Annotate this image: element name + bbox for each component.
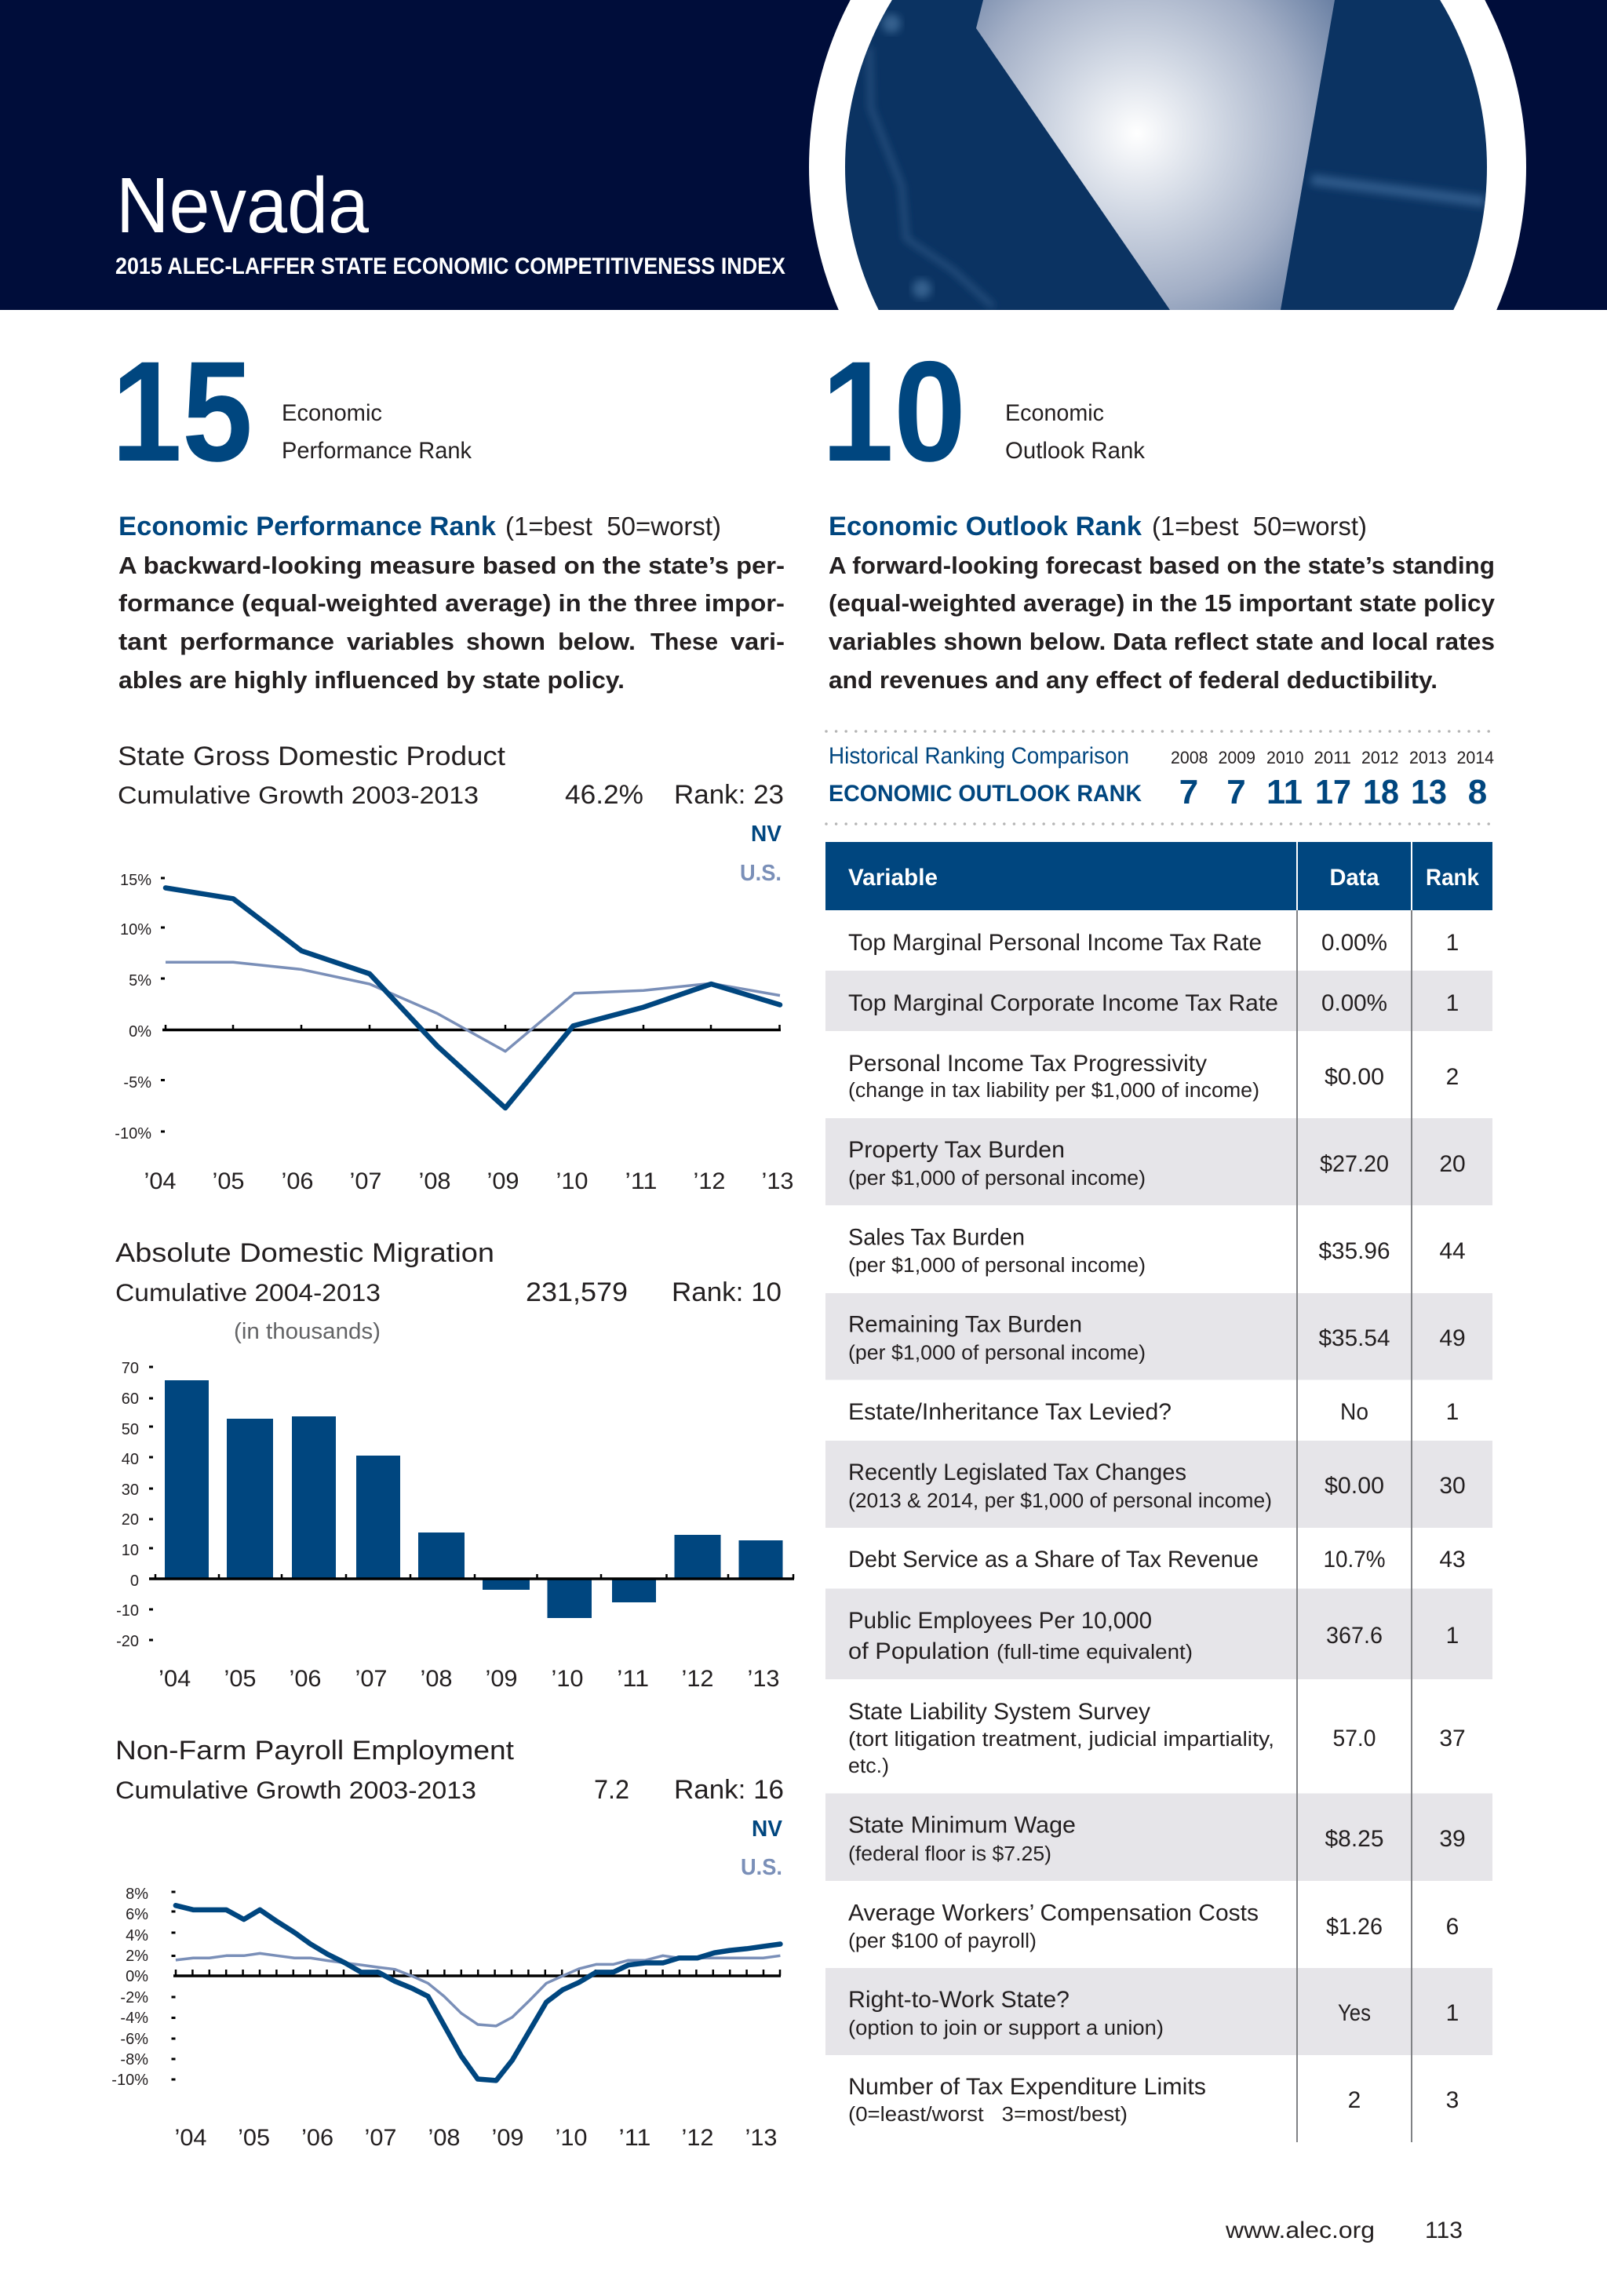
text block: outlook description: and revenues and any effect of federal deductibility. [829, 667, 1438, 694]
row: top marginal personal income tax rate [848, 930, 1459, 956]
heading: State Gross Domestic Product [118, 742, 505, 771]
heading: economic performance rank [118, 512, 721, 541]
row: right-to-work state [848, 1987, 1459, 2039]
line chart: GDP growth: ’04 [144, 1168, 176, 1194]
row: personal income tax progressivity: 2 [1446, 1064, 1459, 1090]
row: property tax burden: 20 [1439, 1151, 1466, 1177]
bar chart: migration: -10 [116, 1602, 139, 1620]
bar chart: migration: -20 [116, 1633, 139, 1650]
row: recently legislated tax changes: $0.00 [1325, 1473, 1384, 1499]
subheading with value and rank [115, 1775, 784, 1805]
rank label: Outlook Rank [1005, 438, 1145, 464]
line chart: GDP growth: ’05 [212, 1168, 245, 1194]
row: state minimum wage: (federal floor is $7.25) [848, 1843, 1051, 1865]
row: recently legislated tax changes: 30 [1439, 1473, 1466, 1499]
legend [740, 822, 782, 886]
row: estate inheritance tax [848, 1399, 1459, 1425]
text block: performance description: tant [118, 629, 167, 655]
text block: performance description: formance (equal-weighted average) in the three impor- [118, 590, 785, 617]
row: personal income tax progressivity: $0.00 [1325, 1064, 1384, 1090]
line chart: payroll employment growth: ’06 [301, 2125, 333, 2151]
subheading with value and rank: Cumulative 2004-2013 [115, 1278, 381, 1307]
line chart: payroll employment growth: ’12 [681, 2125, 714, 2151]
footer: 113 [1425, 2218, 1463, 2243]
row: workers compensation: $1.26 [1326, 1914, 1383, 1940]
bar chart: migration: 70 [122, 1360, 139, 1377]
label: historical ranking comparison: Historical Ranking Comparison [829, 743, 1129, 769]
row: workers compensation: Average Workers’ Compensation Costs [848, 1901, 1259, 1926]
rank label [1005, 400, 1145, 464]
table header: Data [1329, 865, 1379, 891]
bar chart: migration: ’13 [747, 1666, 780, 1692]
year labels: 2008 [1171, 748, 1208, 767]
line chart: GDP growth: 15% [120, 872, 151, 889]
subheading with value and rank: Cumulative Growth 2003-2013 [115, 1776, 476, 1804]
year labels [1171, 748, 1494, 767]
text block: outlook description: A forward-looking forecast based on the state’s standing [829, 552, 1495, 579]
historical rank values: 17 [1315, 773, 1351, 811]
panel: absolute domestic migration [115, 1238, 794, 1692]
row: remaining tax burden: (per $1,000 of personal income) [848, 1342, 1146, 1364]
panel: historical ranking comparison [826, 731, 1494, 824]
bar chart: migration: 0 [130, 1573, 139, 1590]
row: sales tax burden: (per $1,000 of personal income) [848, 1255, 1146, 1277]
table header: Rank [1426, 865, 1479, 891]
row: top marginal corporate income tax rate [848, 990, 1459, 1016]
text block: outlook description [829, 552, 1495, 694]
line chart: GDP growth: 5% [129, 972, 151, 989]
panel: header banner [0, 0, 1607, 310]
footer [1225, 2218, 1463, 2243]
row: state liability system survey: 57.0 [1332, 1726, 1376, 1751]
text block: performance description: performance [180, 629, 334, 655]
line chart: payroll employment growth: -4% [120, 2010, 148, 2027]
line chart: GDP growth: 0% [129, 1023, 151, 1040]
subheading with value and rank: 7.2 [594, 1775, 629, 1805]
line chart: payroll employment growth: ’05 [238, 2125, 270, 2151]
row: tax expenditure limits: 2 [1348, 2087, 1361, 2113]
row: right-to-work state: Right-to-Work State? [848, 1987, 1070, 2013]
year labels: 2014 [1456, 748, 1494, 767]
line chart: GDP growth: ’09 [486, 1168, 519, 1194]
row: public employees: 367.6 [1326, 1623, 1383, 1649]
row: personal income tax progressivity [848, 1051, 1459, 1102]
row: state minimum wage: 39 [1439, 1826, 1466, 1852]
bar chart: migration: 40 [122, 1451, 139, 1468]
text block: performance description: below. [558, 629, 636, 655]
rank label: Economic [1005, 400, 1104, 426]
bar chart: migration: ’06 [289, 1666, 322, 1692]
historical rank values [1179, 773, 1487, 811]
row: property tax burden [848, 1137, 1466, 1190]
line chart: GDP growth [115, 872, 794, 1194]
line chart: payroll employment growth: 6% [126, 1906, 148, 1923]
row: remaining tax burden: 49 [1439, 1325, 1466, 1351]
bar chart: migration: ’07 [355, 1666, 388, 1692]
row: public employees: Public Employees Per 10,000 [848, 1608, 1152, 1634]
row: estate inheritance tax: No [1340, 1399, 1368, 1425]
row: right-to-work state: 1 [1446, 2000, 1459, 2026]
row: property tax burden: (per $1,000 of personal income) [848, 1168, 1146, 1190]
units note: (in thousands) [234, 1319, 381, 1344]
bar chart: migration: ’09 [485, 1666, 518, 1692]
line chart: GDP growth: ’08 [419, 1168, 450, 1194]
row: top marginal personal income tax rate: 1 [1446, 930, 1459, 956]
line chart: payroll employment growth [111, 1886, 781, 2151]
row: right-to-work state: (option to join or support a union) [848, 2017, 1164, 2039]
line chart: GDP growth: ’06 [281, 1168, 314, 1194]
legend: U.S. [740, 861, 782, 886]
row: debt service: 43 [1439, 1547, 1466, 1573]
bar chart: migration: 10 [122, 1542, 139, 1559]
line chart: payroll employment growth: ’13 [745, 2125, 777, 2151]
row: debt service: 10.7% [1323, 1547, 1386, 1573]
subheading with value and rank [115, 1277, 782, 1307]
legend [741, 1817, 783, 1880]
line chart: GDP growth: -5% [123, 1074, 151, 1092]
legend: NV [752, 1817, 783, 1842]
row: top marginal personal income tax rate: 0.00% [1321, 930, 1387, 956]
subheading with value and rank: Rank: 23 [674, 780, 784, 810]
subheading with value and rank: Rank: 16 [674, 1775, 784, 1805]
bar chart: migration: ’10 [551, 1666, 584, 1692]
text block: performance description: shown [466, 629, 545, 655]
row: state minimum wage: $8.25 [1325, 1826, 1384, 1852]
line chart: payroll employment growth: 4% [126, 1927, 148, 1944]
text block: performance description: ables are highly influenced by state policy. [118, 667, 625, 694]
heading: Non-Farm Payroll Employment [115, 1736, 514, 1766]
row: workers compensation [848, 1901, 1459, 1952]
rank label: Performance Rank [282, 438, 472, 464]
row: state liability system survey: etc.) [848, 1755, 889, 1777]
subheading with value and rank: 46.2% [565, 780, 643, 810]
line chart: GDP growth: ’10 [556, 1168, 589, 1194]
footer: www.alec.org [1225, 2218, 1375, 2243]
row: public employees: (full-time equivalent) [997, 1642, 1193, 1664]
row: tax expenditure limits: 3 [1446, 2087, 1459, 2113]
row: estate inheritance tax: Estate/Inheritance Tax Levied? [848, 1399, 1172, 1425]
historical rank values: 7 [1226, 773, 1246, 811]
line chart: payroll employment growth: ’10 [556, 2125, 587, 2151]
row: top marginal corporate income tax rate: 1 [1446, 990, 1459, 1016]
bar chart: migration [116, 1360, 794, 1692]
line chart: GDP growth: ’07 [350, 1168, 381, 1194]
historical rank values: 18 [1363, 773, 1399, 811]
bar chart: migration: 30 [122, 1481, 139, 1499]
subheading with value and rank: Cumulative Growth 2003-2013 [118, 781, 479, 809]
line chart: payroll employment growth: ’04 [174, 2125, 207, 2151]
row: state liability system survey [848, 1699, 1466, 1777]
heading: economic outlook rank: Economic Outlook Rank [829, 512, 1142, 541]
row: public employees: 1 [1446, 1623, 1459, 1649]
year labels: 2013 [1409, 748, 1447, 767]
historical rank values: 7 [1179, 773, 1198, 811]
title: Nevada [116, 162, 369, 250]
heading: Absolute Domestic Migration [115, 1238, 494, 1268]
row: tax expenditure limits: Number of Tax Expenditure Limits [848, 2074, 1206, 2100]
panel: economic outlook rank [822, 331, 1495, 694]
text block: performance description [118, 552, 785, 694]
bar chart: migration: 50 [122, 1421, 139, 1438]
bar chart: migration: ’05 [224, 1666, 256, 1692]
text block: performance description: variables [347, 629, 454, 655]
row: sales tax burden: Sales Tax Burden [848, 1224, 1025, 1251]
historical rank values: 13 [1411, 773, 1447, 811]
row: top marginal personal income tax rate: Top Marginal Personal Income Tax Rate [848, 930, 1262, 956]
text block: outlook description: (equal-weighted average) in the 15 important state policy [829, 590, 1495, 617]
heading: economic performance rank: Economic Performance Rank [118, 512, 497, 541]
text block: performance description: These [650, 629, 718, 655]
table header: Variable [848, 865, 938, 891]
row: public employees [848, 1608, 1459, 1664]
year labels: 2011 [1314, 748, 1351, 767]
row: personal income tax progressivity: Personal Income Tax Progressivity [848, 1051, 1207, 1077]
bar chart: migration: 20 [122, 1511, 139, 1529]
subheading with value and rank: 231,579 [526, 1277, 628, 1307]
row: remaining tax burden: $35.54 [1318, 1325, 1390, 1351]
row: state liability system survey: State Liability System Survey [848, 1699, 1150, 1725]
text block: outlook description: variables shown below. Data reflect state and local rates [829, 629, 1495, 655]
rank number 15: 15 [111, 331, 253, 491]
line chart: payroll employment growth: 8% [126, 1886, 148, 1903]
icon: globe with map of Nevada [809, 0, 1526, 310]
row: sales tax burden: $35.96 [1318, 1238, 1390, 1264]
row: right-to-work state: Yes [1338, 2000, 1371, 2026]
line chart: payroll employment growth: -8% [120, 2051, 148, 2068]
line chart: GDP growth: 10% [120, 921, 151, 938]
row: state minimum wage [848, 1813, 1466, 1865]
line chart: payroll employment growth: ’07 [364, 2125, 397, 2151]
heading: economic outlook rank: (1=best 50=worst) [1152, 512, 1367, 541]
line chart: payroll employment growth: -10% [111, 2072, 148, 2089]
row: sales tax burden [848, 1224, 1466, 1277]
row: property tax burden: Property Tax Burden [848, 1137, 1065, 1163]
row: debt service [848, 1547, 1466, 1573]
row: remaining tax burden: Remaining Tax Burden [848, 1312, 1082, 1337]
year labels: 2012 [1361, 748, 1398, 767]
historical rank values: 8 [1468, 773, 1487, 811]
row: recently legislated tax changes: Recently Legislated Tax Changes [848, 1460, 1186, 1485]
bar chart: migration: 60 [122, 1390, 139, 1408]
line chart: payroll employment growth: ’09 [491, 2125, 524, 2151]
row: tax expenditure limits [848, 2074, 1459, 2126]
bar chart: migration: ’11 [617, 1666, 649, 1692]
year labels: 2009 [1218, 748, 1255, 767]
row: workers compensation: (per $100 of payroll) [848, 1930, 1037, 1952]
panel: economic performance rank [111, 331, 785, 694]
line chart: GDP growth: ’12 [694, 1168, 725, 1194]
row: recently legislated tax changes [848, 1460, 1466, 1512]
row: state minimum wage: State Minimum Wage [848, 1813, 1076, 1838]
subheading with value and rank [118, 780, 784, 810]
rank number 10: 10 [822, 331, 966, 491]
row: state liability system survey: 37 [1439, 1726, 1466, 1751]
legend: U.S. [741, 1855, 782, 1880]
panel: non-farm payroll employment [111, 1736, 784, 2151]
text block: performance description: vari- [731, 629, 785, 655]
historical rank values: 11 [1266, 773, 1303, 811]
line chart: payroll employment growth: ’11 [618, 2125, 651, 2151]
panel: policy variables table [825, 842, 1492, 2142]
row: personal income tax progressivity: (change in tax liability per $1,000 of income) [848, 1080, 1259, 1102]
table row shading [825, 971, 1492, 2055]
heading: economic outlook rank [829, 512, 1367, 541]
row: top marginal corporate income tax rate: Top Marginal Corporate Income Tax Rate [848, 990, 1278, 1016]
row: sales tax burden: 44 [1439, 1238, 1466, 1264]
bar chart: migration: ’04 [159, 1666, 191, 1692]
line chart: GDP growth: ’11 [625, 1168, 658, 1194]
row: recently legislated tax changes: (2013 & 2014, per $1,000 of personal income) [848, 1490, 1272, 1512]
row: top marginal corporate income tax rate: 0.00% [1321, 990, 1387, 1016]
subtitle: 2015 ALEC-LAFFER STATE ECONOMIC COMPETITIVENESS INDEX [115, 253, 785, 279]
row: debt service: Debt Service as a Share of Tax Revenue [848, 1547, 1259, 1573]
line chart: payroll employment growth: 2% [126, 1948, 148, 1965]
row: tax expenditure limits: (0=least/worst 3=most/best) [848, 2104, 1128, 2126]
line chart: payroll employment growth: ’08 [428, 2125, 460, 2151]
row: workers compensation: 6 [1446, 1914, 1459, 1940]
line chart: payroll employment growth: -2% [120, 1989, 148, 2006]
rank label [282, 400, 472, 464]
heading: economic performance rank: (1=best 50=worst) [505, 512, 721, 541]
year labels: 2010 [1266, 748, 1304, 767]
line chart: payroll employment growth: 0% [126, 1968, 148, 1985]
row: estate inheritance tax: 1 [1446, 1399, 1459, 1425]
bar chart: migration: ’08 [421, 1666, 452, 1692]
row: remaining tax burden [848, 1312, 1466, 1364]
line chart: GDP growth: -10% [115, 1125, 151, 1143]
line chart: GDP growth: ’13 [761, 1168, 794, 1194]
row: state liability system survey: (tort litigation treatment, judicial impartiality, [848, 1729, 1274, 1751]
label: economic outlook rank: ECONOMIC OUTLOOK RANK [829, 781, 1142, 807]
rank label: Economic [282, 400, 382, 426]
text block: performance description: A backward-looking measure based on the state’s per- [118, 552, 785, 579]
legend: NV [751, 822, 782, 847]
subheading with value and rank: Rank: 10 [672, 1277, 782, 1307]
line chart: payroll employment growth: -6% [120, 2031, 148, 2048]
row: public employees: of Population [848, 1638, 989, 1664]
bar chart: migration: ’12 [681, 1666, 714, 1692]
table header [825, 842, 1492, 910]
panel: state gross domestic product [115, 742, 794, 1194]
row: property tax burden: $27.20 [1320, 1151, 1389, 1177]
